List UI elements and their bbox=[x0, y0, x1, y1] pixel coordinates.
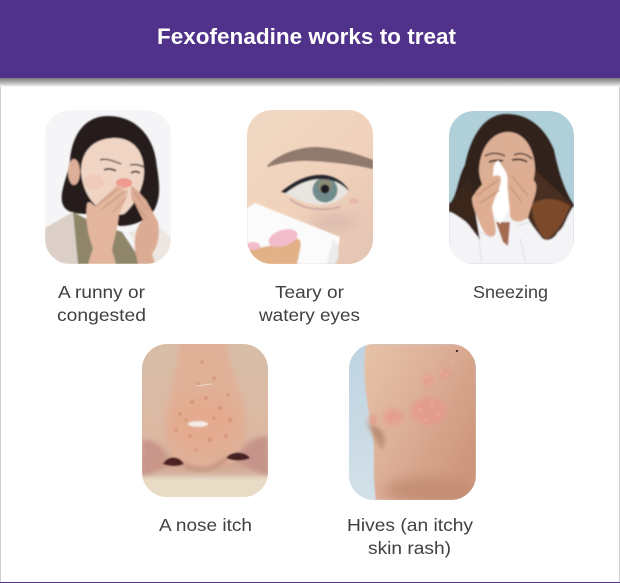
title: Fexofenadine works to treat bbox=[157, 24, 457, 49]
label: congested bbox=[57, 305, 146, 325]
panel: teary or watery eyes bbox=[246, 110, 373, 325]
panel: sneezing bbox=[449, 111, 574, 302]
label bbox=[57, 282, 146, 325]
photo: close-up of a freckled nose bbox=[142, 344, 268, 497]
panel: nose itch bbox=[142, 344, 268, 531]
label: A nose itch bbox=[159, 515, 252, 535]
photo: eye and tissue bbox=[246, 110, 373, 264]
label: watery eyes bbox=[258, 305, 360, 325]
photo: arm with an itchy rash bbox=[349, 344, 476, 502]
label bbox=[347, 515, 473, 558]
header band bbox=[0, 0, 620, 87]
label bbox=[258, 282, 360, 325]
photo: woman holding her nose bbox=[45, 110, 171, 264]
label: skin rash) bbox=[368, 538, 451, 558]
panel: hives bbox=[347, 344, 476, 558]
panel: runny or congested nose bbox=[45, 110, 171, 325]
photo: woman sneezing into tissue bbox=[449, 111, 574, 264]
label: Sneezing bbox=[473, 282, 548, 302]
label: Teary or bbox=[275, 282, 344, 302]
label: Hives (an itchy bbox=[347, 515, 473, 535]
label: A runny or bbox=[58, 282, 145, 302]
